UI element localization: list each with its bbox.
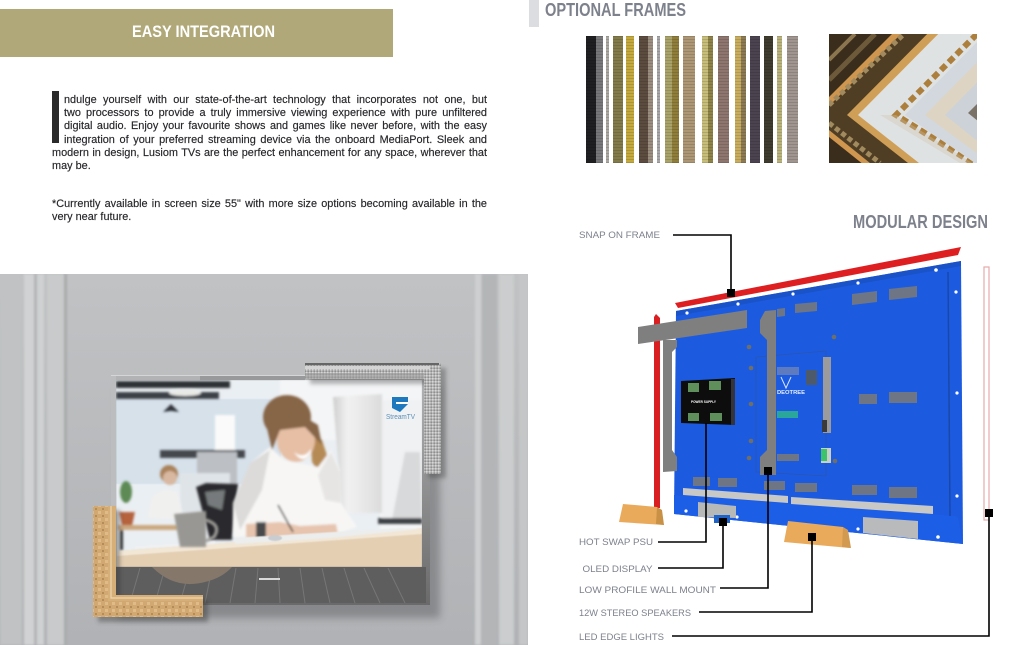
woman at desk xyxy=(233,395,357,538)
text block: intro paragraph: ndulge yourself with our state-of-the-art technology that incorporates not one, but xyxy=(64,94,487,106)
stream tv logo: StreamTV xyxy=(386,412,416,421)
leader: oled display xyxy=(658,518,727,568)
label: led edge lights: LED EDGE LIGHTS xyxy=(579,632,664,642)
wall background xyxy=(0,274,528,645)
lower rails and plates xyxy=(683,488,933,539)
tv screen xyxy=(116,380,422,567)
label: low profile wall mount: LOW PROFILE WALL MOUNT xyxy=(579,585,717,595)
text block: availability footnote xyxy=(52,198,487,223)
monitor xyxy=(333,394,422,524)
tv glass body xyxy=(111,375,430,605)
label: oled display: OLED DISPLAY xyxy=(582,564,652,574)
text block: intro paragraph: digital audio. Enjoy your favourite shows and games like never before, with the easy xyxy=(64,120,487,132)
leader: hot swap psu xyxy=(658,423,706,542)
papers on desk xyxy=(207,541,215,544)
banner heading: EASY INTEGRATION xyxy=(132,22,275,41)
label: snap on frame: SNAP ON FRAME xyxy=(579,230,660,240)
mounting holes xyxy=(684,268,959,539)
frame samples strip xyxy=(586,36,798,163)
coffee mug xyxy=(174,511,217,547)
gold frame corner xyxy=(93,506,208,622)
tv shadow xyxy=(118,386,440,618)
tv floor reflection xyxy=(116,567,426,603)
text block: intro paragraph: integration of your preferred streaming device via the onboard MediaPort. Sleek and xyxy=(64,134,487,146)
banner: easy integration xyxy=(0,9,393,57)
label: hot swap psu: HOT SWAP PSU xyxy=(579,537,653,547)
control board: DEOTREE xyxy=(777,390,805,396)
background colleague and plant xyxy=(118,465,184,550)
heading: modular design: MODULAR DESIGN xyxy=(853,212,988,232)
text block: intro paragraph: modern in design, Lusiom TVs are the perfect enhancement for any space, wherever that xyxy=(52,147,487,159)
label: stereo speakers: 12W STEREO SPEAKERS xyxy=(579,608,691,618)
text block: intro paragraph: may be. xyxy=(52,160,91,172)
led edge light tube xyxy=(984,267,989,520)
hot swap power supply: POWER SUPPLY xyxy=(691,400,716,404)
text block: availability footnote: very near future. xyxy=(52,211,131,223)
photo: tv on wall with frame corners xyxy=(0,274,528,645)
speaker left xyxy=(619,504,664,525)
wall moulding right xyxy=(475,274,528,645)
stream tv logo xyxy=(386,397,415,419)
oled display xyxy=(714,515,730,523)
speaker right xyxy=(784,521,851,548)
ornate frame corner photo xyxy=(829,34,977,163)
snap on frame red strips xyxy=(654,247,961,508)
text block: intro paragraph xyxy=(52,91,488,172)
heading: optional frames: OPTIONAL FRAMES xyxy=(545,0,686,20)
leader: snap on frame xyxy=(673,235,735,297)
blue back panel xyxy=(674,261,963,544)
text block: intro paragraph: two processors to provide a truly immersive viewing experience with pure unfiltered xyxy=(64,107,487,119)
low profile wall mount brackets xyxy=(638,310,776,475)
silver frame corner xyxy=(305,363,446,478)
desk xyxy=(116,534,422,567)
hot swap power supply xyxy=(681,378,735,425)
wall moulding left xyxy=(0,274,67,645)
drop cap bar xyxy=(52,91,59,143)
control board xyxy=(756,351,831,476)
connector slots xyxy=(693,286,917,498)
leader: low profile wall mount xyxy=(720,467,772,588)
leader: led edge lights xyxy=(672,509,993,636)
optional frames accent block xyxy=(529,0,539,27)
leader: stereo speakers xyxy=(699,533,816,612)
office chair xyxy=(196,483,238,540)
text block: availability footnote: *Currently available in screen size 55" with more size options becoming available in the xyxy=(52,198,487,210)
standoffs xyxy=(747,335,837,463)
